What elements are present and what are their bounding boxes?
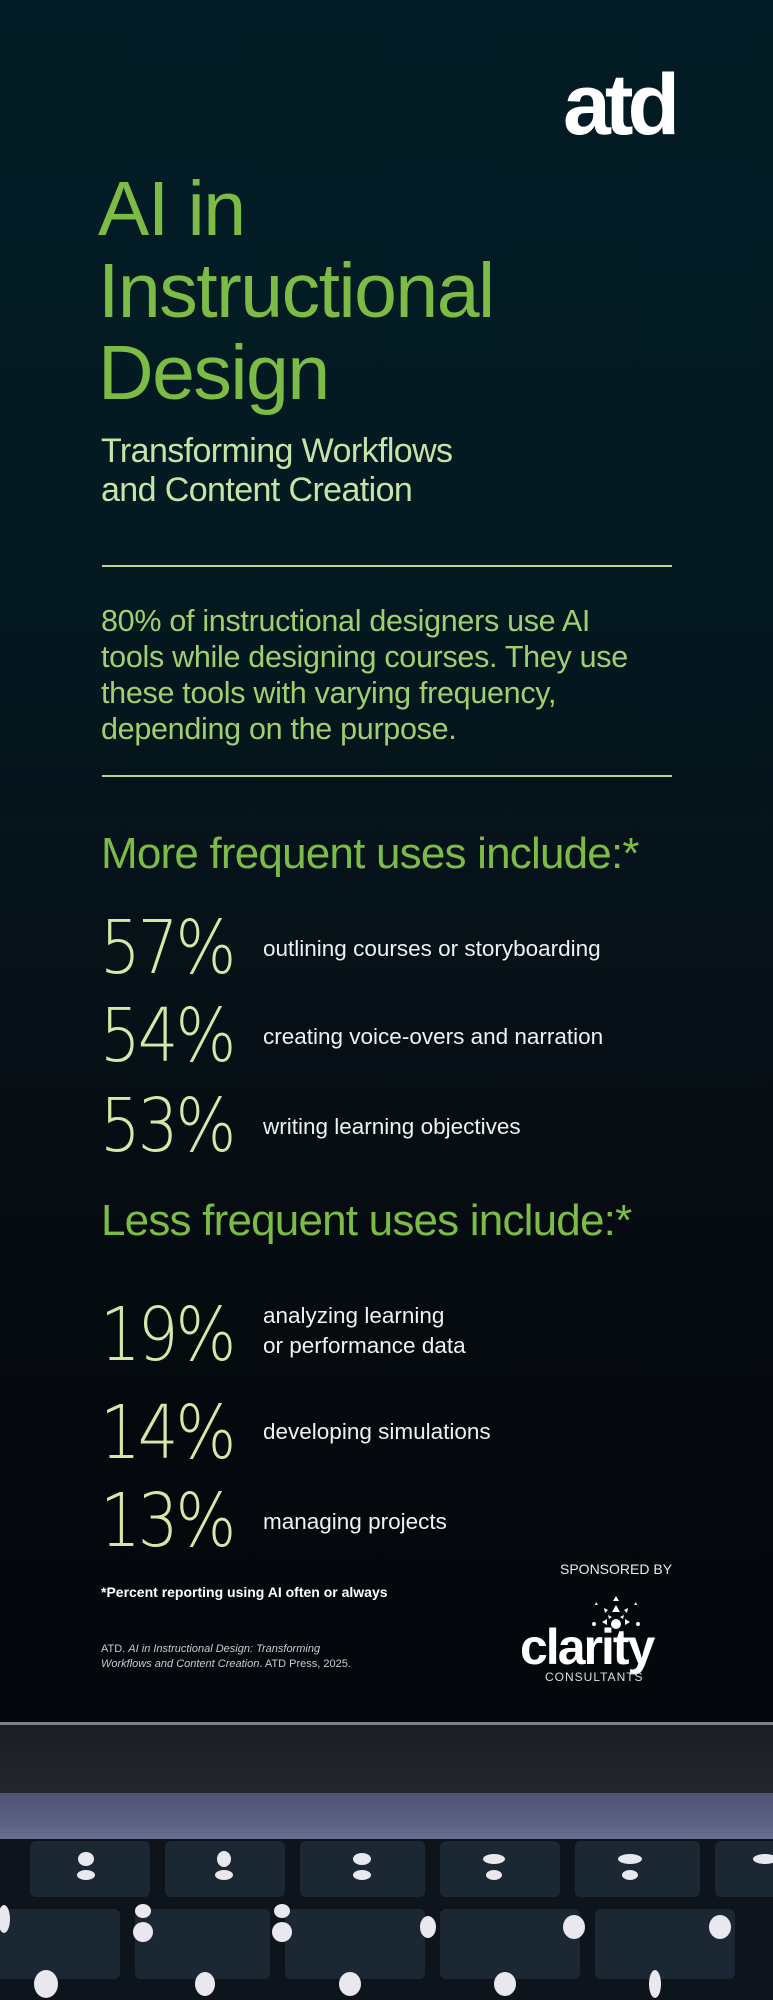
sponsored by label: SPONSORED BY: [560, 1561, 672, 1577]
stat: 53%: writing learning objectives: [263, 1114, 521, 1139]
intro paragraph: [101, 604, 628, 746]
footnote: *Percent reporting using AI often or always: [101, 1584, 388, 1600]
logo: atd: atd: [563, 57, 674, 153]
citation: ATD. AI in Instructional Design: Transforming: [101, 1643, 320, 1655]
subtitle: and Content Creation: [101, 471, 412, 509]
stat: 57%: 57%: [100, 906, 233, 991]
stat: 57%: outlining courses or storyboarding: [263, 936, 601, 961]
stat: 13%: managing projects: [263, 1509, 447, 1534]
stat: 13%: 13%: [100, 1479, 233, 1564]
divider top: [102, 565, 672, 567]
title: Design: [98, 330, 329, 416]
subtitle: [101, 432, 452, 509]
stat: 14%: developing simulations: [263, 1419, 491, 1444]
stat: 14%: 14%: [100, 1391, 233, 1476]
heading: less frequent uses: Less frequent uses include:*: [101, 1196, 631, 1245]
stat: 54%: creating voice-overs and narration: [263, 1024, 603, 1049]
title: AI in: [98, 166, 245, 252]
heading: more frequent uses: More frequent uses include:*: [101, 829, 639, 878]
logo: clarity consultants: clarity: [520, 1619, 653, 1675]
stat: 19%: [100, 1293, 466, 1378]
citation: [101, 1643, 351, 1670]
stat: 19%: 19%: [100, 1293, 233, 1378]
citation: Workflows and Content Creation. ATD Press, 2025.: [101, 1658, 351, 1670]
intro paragraph: 80% of instructional designers use AI: [101, 604, 590, 638]
stat: 54%: 54%: [100, 994, 233, 1079]
divider bottom: [102, 775, 672, 777]
stat: 53%: [100, 1084, 521, 1169]
stat: 53%: 53%: [100, 1084, 233, 1169]
stat: 19%: analyzing learning: [263, 1303, 444, 1328]
stat: 54%: [100, 994, 603, 1079]
stat: 14%: [100, 1391, 491, 1476]
title: Instructional: [98, 248, 494, 334]
title: [98, 166, 494, 416]
intro paragraph: tools while designing courses. They use: [101, 640, 628, 674]
logo: clarity consultants: [520, 1596, 655, 1684]
intro paragraph: these tools with varying frequency,: [101, 676, 556, 710]
stat: 57%: [100, 906, 601, 991]
laptop image: screen edge, bezel and keyboard: [0, 1722, 773, 2000]
subtitle: Transforming Workflows: [101, 432, 452, 470]
stat: 19%: or performance data: [263, 1333, 466, 1358]
stat: 13%: [100, 1479, 447, 1564]
intro paragraph: depending on the purpose.: [101, 712, 456, 746]
logo: clarity consultants: CONSULTANTS: [545, 1670, 644, 1684]
